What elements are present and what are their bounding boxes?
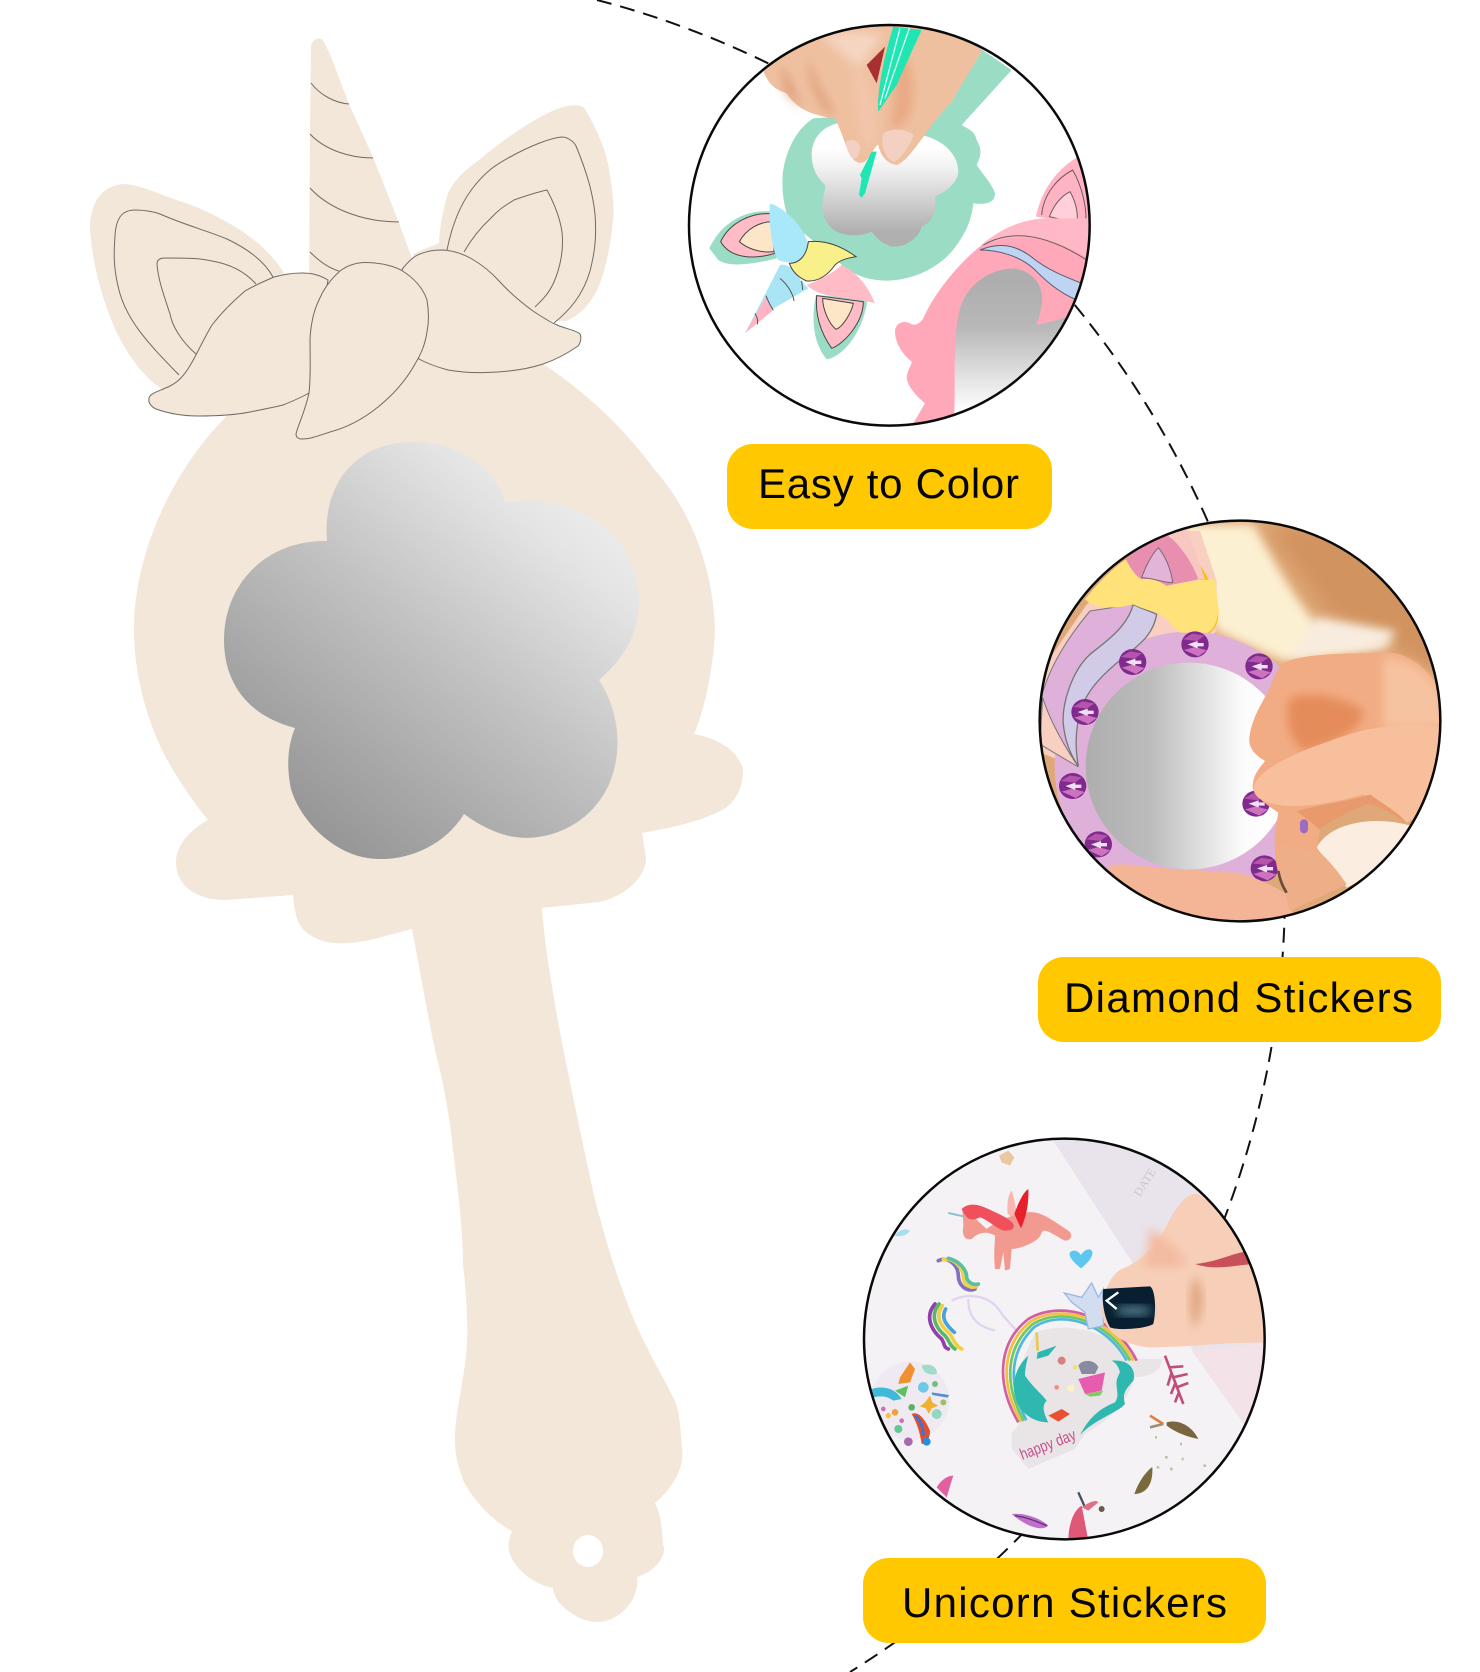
pink mirror hair <box>983 218 1088 257</box>
green pen <box>878 27 922 112</box>
ear <box>1181 529 1205 580</box>
confetti dots <box>1155 1437 1206 1469</box>
photo circle: placing diamond stickers <box>1037 518 1443 924</box>
bow: centre petal <box>296 262 428 439</box>
photo circle: coloring the mirror <box>689 22 1093 435</box>
label pill: easy to color <box>727 444 1052 529</box>
mint mirror <box>782 48 1012 281</box>
small unicorn horn <box>745 265 808 333</box>
gems <box>1059 631 1278 881</box>
bow: right petal <box>390 250 581 373</box>
dashed connector arc <box>597 0 1285 1672</box>
blurred background <box>1037 518 1443 924</box>
pink winged unicorn <box>948 1189 1071 1271</box>
rainbow mane one <box>938 1258 978 1290</box>
pale left side <box>1037 531 1217 768</box>
palm at the bottom <box>1108 864 1297 924</box>
horn and ear outlines <box>114 83 596 375</box>
bottom unicorn stickers <box>1068 1506 1088 1541</box>
mint mirror glass <box>812 122 958 247</box>
hand <box>1249 652 1439 885</box>
brown hair stickers <box>1167 1421 1198 1439</box>
small unicorn lower ear <box>813 295 867 359</box>
yellow bow <box>1085 559 1218 633</box>
yellow back of mirror <box>1200 566 1218 633</box>
horn <box>309 39 420 290</box>
hand holding pen <box>763 22 982 165</box>
pink mirror ear <box>1036 158 1088 218</box>
periwinkle hair stripe <box>1063 604 1157 766</box>
round glass <box>1086 663 1292 869</box>
photo circle: unicorn sticker sheet <box>864 1136 1268 1541</box>
label pill: easy to color: Easy to Color <box>758 460 1019 507</box>
circle border <box>1040 521 1440 921</box>
happy day text: happy day <box>1018 1427 1079 1464</box>
label pill: unicorn stickers: Unicorn Stickers <box>902 1579 1227 1626</box>
bow: left petal <box>149 273 328 416</box>
rainbow mane two <box>930 1304 962 1349</box>
label pill: unicorn stickers <box>863 1558 1266 1643</box>
small sticker cluster <box>871 1361 949 1446</box>
cream lower right <box>1317 821 1417 888</box>
circle border <box>689 25 1090 426</box>
blue crown sticker under nail <box>1064 1283 1103 1329</box>
right ear <box>413 105 614 321</box>
feather sticker <box>1165 1356 1188 1404</box>
lilac ring <box>1054 632 1280 880</box>
feature: diamond stickers <box>1037 518 1443 1042</box>
feature: unicorn stickers <box>863 1136 1268 1643</box>
fingernails <box>882 130 913 162</box>
small unicorn ear top <box>709 211 777 264</box>
flower mirror <box>224 442 639 859</box>
pink mirror glass <box>954 268 1066 414</box>
top corner sticker <box>999 1151 1014 1166</box>
blue heart <box>1070 1249 1092 1268</box>
transparent rainbow sticker <box>1003 1311 1162 1469</box>
finger with dark nail <box>1102 1194 1266 1347</box>
feature: easy to color <box>689 22 1093 529</box>
mirror body and handle <box>134 340 743 1622</box>
faint lilac unicorn <box>952 1296 1020 1334</box>
left ear <box>90 184 300 396</box>
pink mirror <box>895 218 1093 435</box>
date text: DATE <box>1131 1166 1159 1199</box>
circle border <box>864 1139 1265 1539</box>
desk behind sheet <box>1053 1140 1264 1350</box>
label pill: diamond stickers <box>1038 957 1441 1042</box>
small unicorn petals <box>770 203 808 263</box>
handle hole <box>573 1535 603 1567</box>
label pill: diamond stickers: Diamond Stickers <box>1064 974 1413 1021</box>
unicorn hand mirror illustration <box>90 39 743 1622</box>
